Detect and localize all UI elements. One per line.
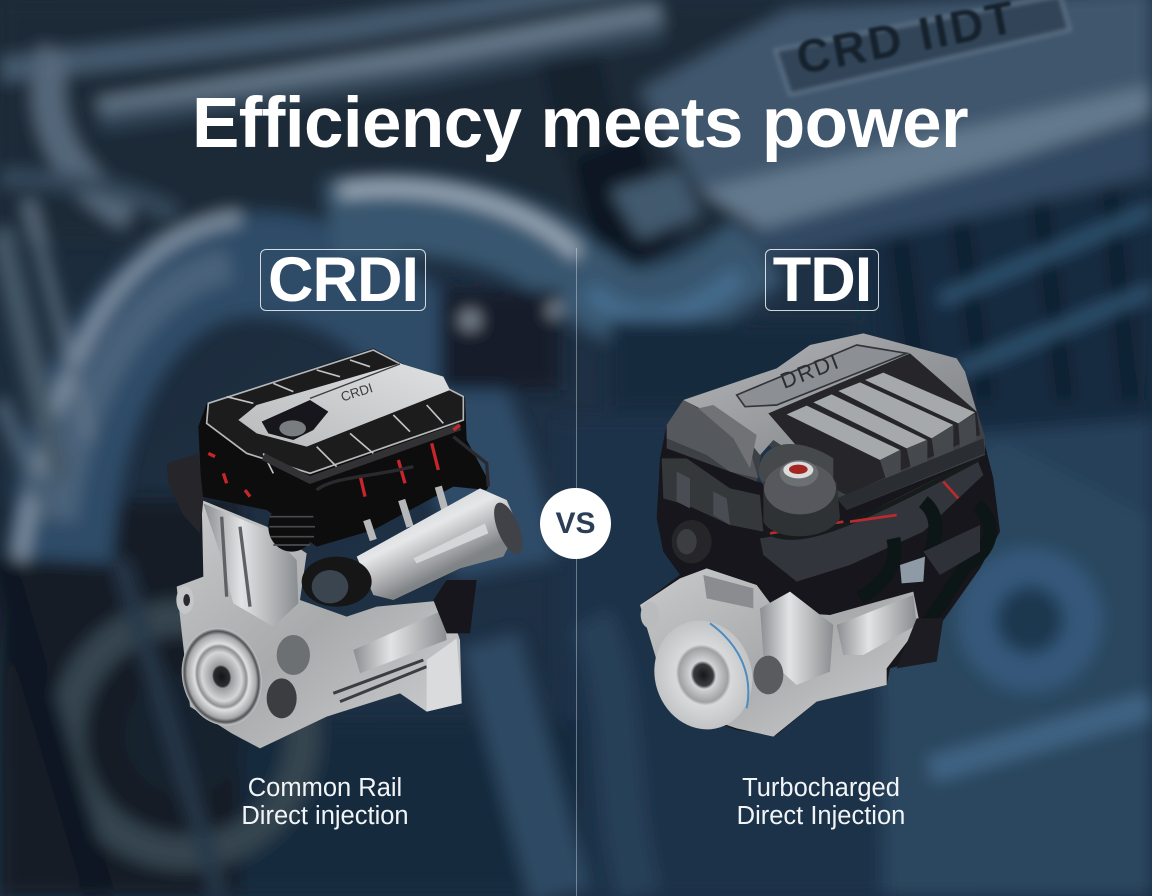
cover side xyxy=(667,333,985,510)
caption: TDI: Turbocharged xyxy=(742,774,900,802)
cover plate xyxy=(238,363,450,447)
icon: TDI engine xyxy=(640,333,1000,737)
caption: CRDI xyxy=(241,774,409,830)
frame grid xyxy=(207,350,463,473)
turbo centre xyxy=(302,557,372,607)
logo recess xyxy=(737,345,907,407)
caption: TDI: Direct Injection xyxy=(737,802,905,830)
title: Efficiency meets power xyxy=(192,84,968,163)
bellows xyxy=(268,502,315,552)
label: TDI: TDI xyxy=(773,245,871,315)
ribs xyxy=(768,353,980,495)
oil cap xyxy=(758,444,833,512)
badge: VS xyxy=(540,488,611,559)
dark base xyxy=(640,425,1000,735)
dark upper mass xyxy=(198,348,490,547)
label: CRDI: CRDI xyxy=(268,245,418,315)
caption: CRDI: Common Rail xyxy=(248,774,402,802)
caption: TDI xyxy=(737,774,905,830)
icon: CRDI engine xyxy=(166,348,522,748)
wiring and injectors xyxy=(208,425,460,497)
divider line xyxy=(576,248,577,896)
engine block xyxy=(177,500,462,748)
hoses xyxy=(860,502,990,628)
badge: VS: VS xyxy=(555,507,596,540)
cover top xyxy=(683,333,977,482)
lower black strip xyxy=(433,580,477,633)
catalyst cylinder xyxy=(357,488,518,600)
manifold band xyxy=(760,458,983,582)
silver lower body xyxy=(640,568,920,737)
background logo plate xyxy=(775,0,1070,95)
pulley xyxy=(172,619,272,734)
bracket xyxy=(167,453,203,533)
icon: TDI engine: DRDI xyxy=(777,348,843,394)
caption: CRDI: Direct injection xyxy=(241,802,409,830)
icon: CRDI engine: CRDI xyxy=(339,380,375,405)
left gear & boxes xyxy=(672,520,712,563)
pulley xyxy=(640,608,766,742)
